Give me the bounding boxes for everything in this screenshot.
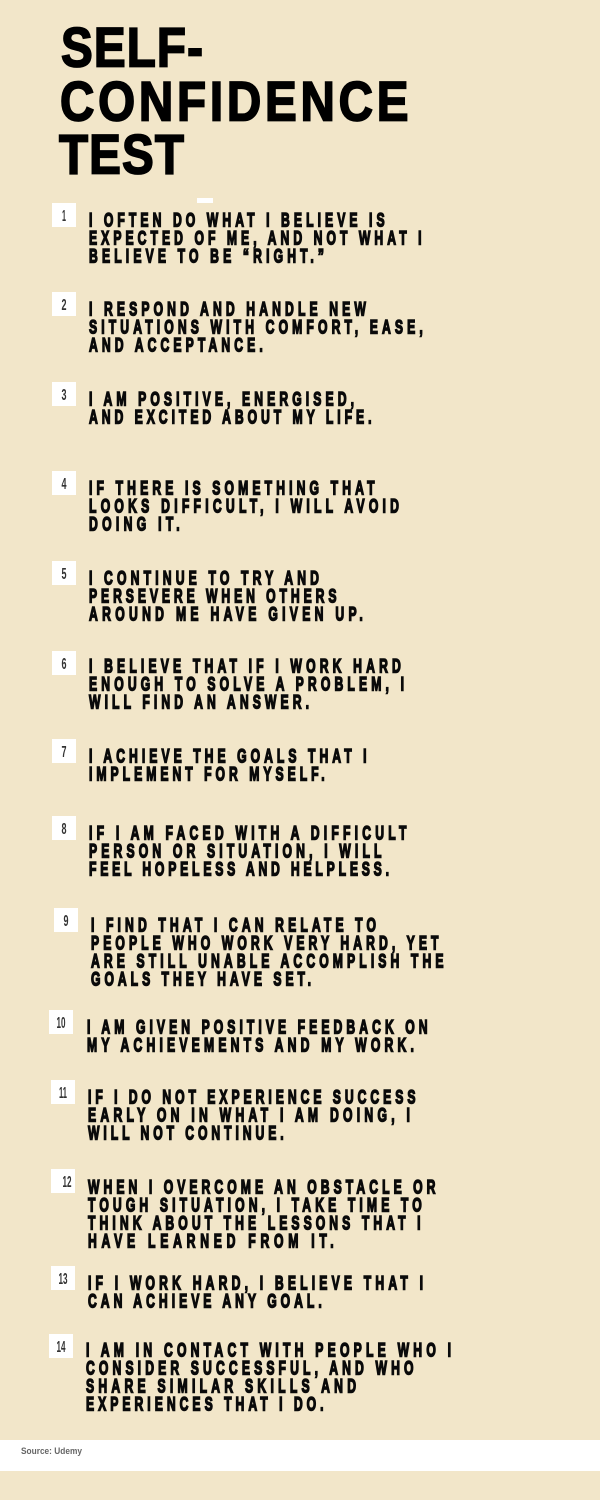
question 6: I BELIEVE THAT IF I WORK HARD: [89, 656, 401, 677]
question 5: I CONTINUE TO TRY AND: [89, 568, 319, 589]
question 3: [89, 389, 372, 428]
title: CONFIDENCE: [60, 71, 408, 133]
question 1: BELIEVE TO BE “RIGHT.”: [89, 246, 324, 267]
question 4: [89, 478, 399, 535]
number badge 9: 9: [64, 913, 69, 930]
item 2: [52, 292, 423, 356]
question 14: I AM IN CONTACT WITH PEOPLE WHO I: [86, 1340, 451, 1361]
question 7: I ACHIEVE THE GOALS THAT I: [89, 746, 366, 767]
number badge 13: 13: [58, 1271, 68, 1288]
question 6: ENOUGH TO SOLVE A PROBLEM, I: [89, 674, 404, 695]
question 4: LOOKS DIFFICULT, I WILL AVOID: [89, 496, 399, 517]
number badge 11: 11: [59, 1085, 67, 1102]
number badge 4: 4: [62, 476, 67, 493]
item 10: [49, 1010, 428, 1056]
question 6: [89, 656, 404, 713]
number badge 14: [49, 1334, 73, 1358]
question 5: PERSEVERE WHEN OTHERS: [89, 586, 337, 607]
item 5: [52, 561, 363, 625]
question 11: WILL NOT CONTINUE.: [88, 1123, 284, 1144]
number badge 9: [54, 908, 78, 932]
number badge 6: [52, 651, 76, 675]
number badge 1: [52, 203, 76, 227]
question 5: AROUND ME HAVE GIVEN UP.: [89, 604, 363, 625]
source band: Source: Udemy: [21, 1446, 82, 1456]
question 2: AND ACCEPTANCE.: [89, 335, 263, 356]
item 3: [52, 382, 372, 428]
question 9: PEOPLE WHO WORK VERY HARD, YET: [91, 933, 439, 954]
number badge 8: [52, 816, 76, 840]
number badge 5: 5: [62, 566, 67, 583]
number badge 2: [52, 292, 76, 316]
number badge 3: 3: [62, 387, 67, 404]
question 10: I AM GIVEN POSITIVE FEEDBACK ON: [87, 1017, 428, 1038]
item 7: [52, 739, 366, 785]
question 11: IF I DO NOT EXPERIENCE SUCCESS: [88, 1087, 416, 1108]
question 2: [89, 299, 423, 356]
question 8: FEEL HOPELESS AND HELPLESS.: [89, 859, 389, 880]
item 1: [52, 203, 422, 267]
question 13: [88, 1273, 423, 1312]
question 12: HAVE LEARNED FROM IT.: [88, 1231, 334, 1252]
question 5: [89, 568, 363, 625]
question 13: CAN ACHIEVE ANY GOAL.: [88, 1291, 322, 1312]
question 2: I RESPOND AND HANDLE NEW: [89, 299, 366, 320]
question 10: [87, 1017, 428, 1056]
question 8: PERSON OR SITUATION, I WILL: [89, 841, 382, 862]
number badge 12: 12: [62, 1174, 72, 1191]
question 1: [89, 210, 422, 267]
question 14: SHARE SIMILAR SKILLS AND: [86, 1376, 356, 1397]
question 8: IF I AM FACED WITH A DIFFICULT: [89, 823, 407, 844]
item 13: [51, 1266, 423, 1312]
question 9: GOALS THEY HAVE SET.: [91, 969, 311, 990]
number badge 5: [52, 561, 76, 585]
question 1: EXPECTED OF ME, AND NOT WHAT I: [89, 228, 422, 249]
question 7: [89, 746, 366, 785]
number badge 13: [51, 1266, 75, 1290]
question 1: I OFTEN DO WHAT I BELIEVE IS: [89, 210, 385, 231]
number badge 10: [49, 1010, 73, 1034]
question 9: I FIND THAT I CAN RELATE TO: [91, 915, 376, 936]
question 7: IMPLEMENT FOR MYSELF.: [89, 764, 325, 785]
item 12: [51, 1169, 436, 1252]
question 3: I AM POSITIVE, ENERGISED,: [89, 389, 354, 410]
question 12: WHEN I OVERCOME AN OBSTACLE OR: [88, 1177, 436, 1198]
question 2: SITUATIONS WITH COMFORT, EASE,: [89, 317, 423, 338]
number badge 2: 2: [62, 297, 67, 314]
item 6: [52, 651, 404, 713]
item 4: [52, 471, 399, 535]
question 12: TOUGH SITUATION, I TAKE TIME TO: [88, 1195, 422, 1216]
source band: [0, 1440, 600, 1471]
number badge 14: 14: [56, 1339, 66, 1356]
number badge 7: 7: [62, 744, 67, 761]
question 11: EARLY ON IN WHAT I AM DOING, I: [88, 1105, 410, 1126]
number badge 8: 8: [62, 821, 67, 838]
question 14: CONSIDER SUCCESSFUL, AND WHO: [86, 1358, 414, 1379]
question 8: [89, 823, 407, 880]
number badge 10: 10: [56, 1015, 66, 1032]
question 14: [86, 1340, 451, 1415]
question 12: THINK ABOUT THE LESSONS THAT I: [88, 1213, 420, 1234]
question 12: [88, 1177, 436, 1252]
question 13: IF I WORK HARD, I BELIEVE THAT I: [88, 1273, 423, 1294]
question 6: WILL FIND AN ANSWER.: [89, 692, 309, 713]
title: [59, 17, 408, 186]
number badge 1: 1: [62, 208, 66, 225]
number badge 3: [52, 382, 76, 406]
item 9: [54, 908, 444, 990]
item 14: [49, 1334, 451, 1415]
number badge 6: 6: [62, 656, 67, 673]
title: SELF-: [61, 17, 203, 79]
question 3: AND EXCITED ABOUT MY LIFE.: [89, 407, 372, 428]
number badge 11: [51, 1080, 75, 1104]
title: TEST: [59, 124, 184, 186]
question 10: MY ACHIEVEMENTS AND MY WORK.: [87, 1035, 414, 1056]
question 11: [88, 1087, 416, 1144]
number badge 12: [51, 1169, 75, 1193]
number badge 4: [52, 471, 76, 495]
item 8: [52, 816, 407, 880]
item 11: [51, 1080, 416, 1144]
question 9: [91, 915, 444, 990]
question 4: DOING IT.: [89, 514, 180, 535]
question 4: IF THERE IS SOMETHING THAT: [89, 478, 375, 499]
question 9: ARE STILL UNABLE ACCOMPLISH THE: [91, 951, 444, 972]
question 14: EXPERIENCES THAT I DO.: [86, 1394, 324, 1415]
number badge 7: [52, 739, 76, 763]
